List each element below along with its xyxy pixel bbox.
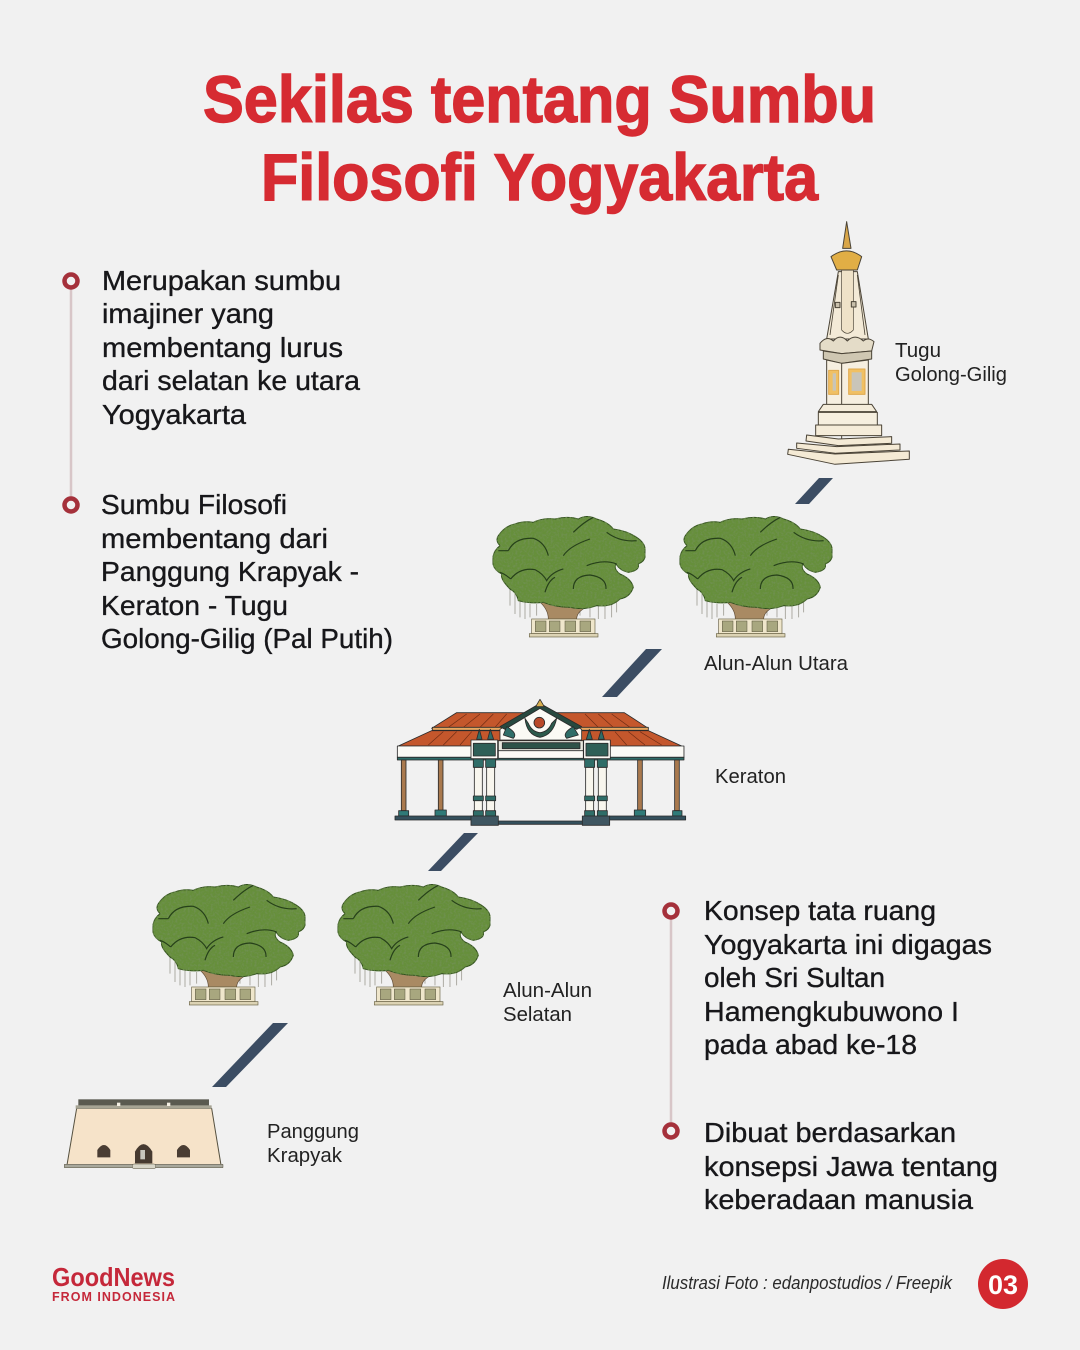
icon: Panggung Krapyak [64, 1099, 223, 1169]
timeline: upper left bullets [64, 274, 78, 512]
label: Keraton: Keraton [715, 766, 786, 788]
label: Tugu Golong-Gilig: Golong-Gilig [895, 364, 1007, 386]
text block: axis extent: Panggung Krapyak - [101, 556, 359, 587]
text block: axis extent: membentang dari [101, 523, 328, 554]
logo: GoodNews from Indonesia [52, 1262, 175, 1304]
text block: Javanese concept [704, 1117, 998, 1215]
logo: GoodNews from Indonesia: GoodNews [52, 1262, 175, 1292]
title: Filosofi Yogyakarta [261, 140, 819, 214]
text block: imaginary axis: membentang lurus [102, 332, 343, 363]
label: Panggung Krapyak [267, 1121, 359, 1167]
title: Sekilas tentang Sumbu [203, 62, 876, 136]
text block: Javanese concept: konsepsi Jawa tentang [704, 1151, 998, 1182]
text block: imaginary axis: imajiner yang [102, 298, 274, 329]
text block: axis extent: Golong-Gilig (Pal Putih) [101, 623, 393, 654]
timeline: lower right bullets [664, 904, 678, 1138]
label: Panggung Krapyak: Panggung [267, 1121, 359, 1143]
logo: GoodNews from Indonesia: FROM INDONESIA [52, 1290, 175, 1304]
title [203, 62, 876, 214]
page number badge: 03 [988, 1270, 1018, 1300]
label: Panggung Krapyak: Krapyak [267, 1145, 343, 1167]
text block: concept origin [704, 895, 992, 1060]
icon: Tugu monument [788, 222, 909, 464]
text block: concept origin: Konsep tata ruang [704, 895, 936, 926]
label: Alun-Alun Selatan [503, 980, 592, 1026]
road segment 1 [795, 478, 833, 504]
text block: Javanese concept: keberadaan manusia [704, 1184, 973, 1215]
icon: Keraton building [395, 699, 686, 825]
icon: trees Alun-Alun Utara [493, 516, 832, 637]
text block: imaginary axis: Merupakan sumbu [102, 265, 341, 296]
label: Tugu Golong-Gilig: Tugu [895, 340, 941, 362]
label: Alun-Alun Utara: Alun-Alun Utara [704, 653, 849, 675]
text block: axis extent [101, 489, 393, 654]
text block: axis extent: Keraton - Tugu [101, 590, 288, 621]
text block: concept origin: pada abad ke-18 [704, 1029, 917, 1060]
text block: imaginary axis: dari selatan ke utara [102, 365, 360, 396]
text block: imaginary axis: Yogyakarta [102, 399, 246, 430]
text block: axis extent: Sumbu Filosofi [101, 489, 287, 520]
photo credit: Ilustrasi Foto : edanpostudios / Freepik [662, 1272, 954, 1293]
text block: concept origin: Hamengkubuwono I [704, 996, 959, 1027]
text block: concept origin: Yogyakarta ini digagas [704, 929, 992, 960]
label: Alun-Alun Selatan: Alun-Alun [503, 980, 592, 1002]
road segment 4 [212, 1023, 288, 1087]
text block: Javanese concept: Dibuat berdasarkan [704, 1117, 956, 1148]
label: Tugu Golong-Gilig [895, 340, 1007, 386]
text block: imaginary axis [102, 265, 360, 430]
label: Alun-Alun Selatan: Selatan [503, 1004, 572, 1026]
text block: concept origin: oleh Sri Sultan [704, 962, 885, 993]
icon: trees Alun-Alun Selatan [153, 884, 490, 1005]
page number badge [978, 1259, 1028, 1309]
road segment 2 [602, 649, 662, 697]
road segment 3 [428, 833, 478, 871]
